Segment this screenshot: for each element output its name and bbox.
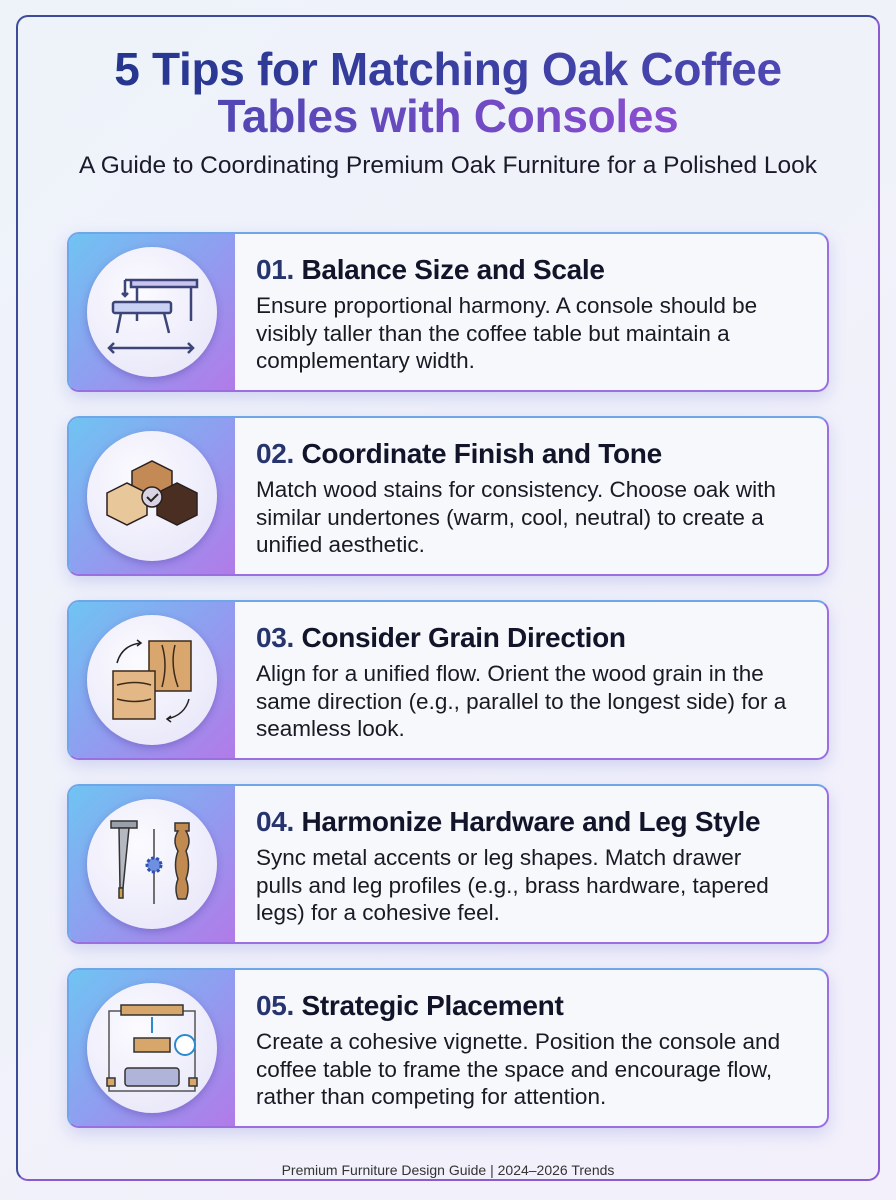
icon: wood grain xyxy=(87,615,217,745)
heading: 02. Coordinate Finish and Tone xyxy=(256,438,662,469)
text xyxy=(256,477,776,557)
icon: legs xyxy=(87,799,217,929)
card 4: hardware xyxy=(67,784,829,944)
text: Ensure proportional harmony. A console should be xyxy=(256,293,757,318)
text: Align for a unified flow. Orient the wood grain in the xyxy=(256,661,764,686)
card 3: grain xyxy=(67,600,829,760)
card 5: placement xyxy=(67,968,829,1128)
icon: room layout xyxy=(87,983,217,1113)
card 1: balance size xyxy=(67,232,829,392)
title xyxy=(114,43,782,142)
footer: Premium Furniture Design Guide | 2024–2026 Trends xyxy=(282,1162,614,1178)
title: Tables with Consoles xyxy=(218,90,678,142)
text xyxy=(256,661,786,741)
text xyxy=(256,293,757,373)
heading: 05. Strategic Placement xyxy=(256,990,563,1021)
text: Sync metal accents or leg shapes. Match drawer xyxy=(256,845,741,870)
text: same direction (e.g., parallel to the longest side) for a xyxy=(256,688,786,714)
heading: 01. Balance Size and Scale xyxy=(256,254,605,285)
text: complementary width. xyxy=(256,348,475,373)
text: legs) for a cohesive feel. xyxy=(256,900,500,925)
text xyxy=(256,845,769,925)
heading: 03. Consider Grain Direction xyxy=(256,622,626,653)
subtitle: A Guide to Coordinating Premium Oak Furniture for a Polished Look xyxy=(79,152,817,179)
text: Create a cohesive vignette. Position the console and xyxy=(256,1029,780,1054)
icon: wood cubes xyxy=(87,431,217,561)
card 2: finish tone xyxy=(67,416,829,576)
icon: tables xyxy=(87,247,217,377)
text: visibly taller than the coffee table but maintain a xyxy=(256,320,730,346)
title: 5 Tips for Matching Oak Coffee xyxy=(114,43,782,95)
text: unified aesthetic. xyxy=(256,532,425,557)
text: seamless look. xyxy=(256,716,405,741)
text: similar undertones (warm, cool, neutral) to create a xyxy=(256,504,764,530)
text xyxy=(256,1029,780,1109)
text: rather than competing for attention. xyxy=(256,1084,606,1109)
text: Match wood stains for consistency. Choose oak with xyxy=(256,477,776,502)
heading: 04. Harmonize Hardware and Leg Style xyxy=(256,806,760,837)
text: pulls and leg profiles (e.g., brass hardware, tapered xyxy=(256,872,769,898)
text: coffee table to frame the space and encourage flow, xyxy=(256,1056,772,1082)
